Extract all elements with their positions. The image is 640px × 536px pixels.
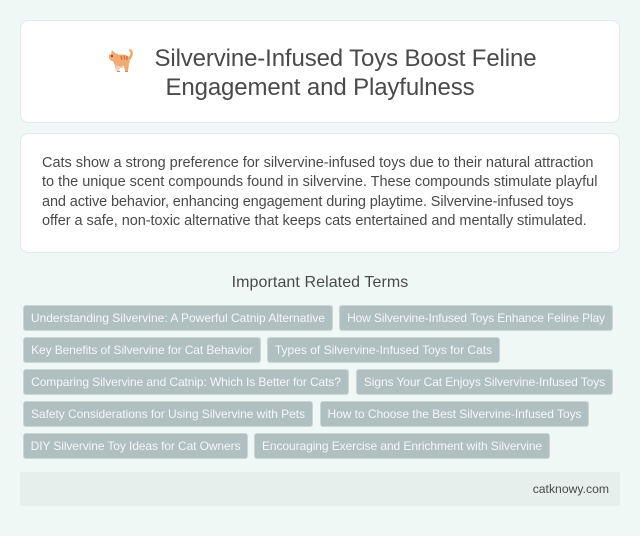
chip: Signs Your Cat Enjoys Silvervine-Infused Toys — [364, 375, 605, 389]
chip — [267, 337, 500, 363]
icon: cat — [109, 49, 133, 72]
text block: Cats show a strong preference for silvervine-infused toys due to their natural attraction — [42, 155, 593, 171]
chip: Safety Considerations for Using Silvervine with Pets — [31, 407, 305, 421]
chip — [356, 369, 613, 395]
chip: Understanding Silvervine: A Powerful Catnip Alternative — [31, 311, 325, 325]
text block — [42, 155, 597, 229]
chip: Comparing Silvervine and Catnip: Which Is Better for Cats? — [31, 375, 341, 389]
chip — [339, 305, 613, 331]
chip — [23, 305, 333, 331]
chip: Encouraging Exercise and Enrichment with Silvervine — [262, 439, 542, 453]
panel: description — [20, 133, 620, 253]
panel: title card — [20, 20, 620, 123]
chip: Key Benefits of Silvervine for Cat Behavior — [31, 343, 253, 357]
heading: Engagement and Playfulness — [166, 74, 474, 101]
chip: How Silvervine-Infused Toys Enhance Feline Play — [347, 311, 605, 325]
panel: term chips — [23, 305, 613, 459]
chip — [23, 433, 248, 459]
chip: How to Choose the Best Silvervine-Infused Toys — [327, 407, 582, 421]
chip — [23, 369, 349, 395]
chip — [23, 401, 313, 427]
heading — [154, 45, 536, 101]
chip — [254, 433, 550, 459]
heading: Silvervine-Infused Toys Boost Feline — [154, 45, 536, 72]
text block: offer a safe, non-toxic alternative that keeps cats entertained and mentally stimulated. — [42, 213, 587, 229]
chip — [23, 337, 261, 363]
footer source: catknowy.com — [533, 482, 609, 496]
heading: related terms: Important Related Terms — [232, 274, 408, 291]
footer bar — [20, 472, 620, 506]
text block: to the unique scent compounds found in silvervine. These compounds stimulate playful — [42, 174, 597, 190]
text block: and active behavior, enhancing engagement during playtime. Silvervine-infused toys — [42, 194, 573, 210]
chip — [320, 401, 589, 427]
chip: Types of Silvervine-Infused Toys for Cats — [275, 343, 492, 357]
chip: DIY Silvervine Toy Ideas for Cat Owners — [31, 439, 240, 453]
